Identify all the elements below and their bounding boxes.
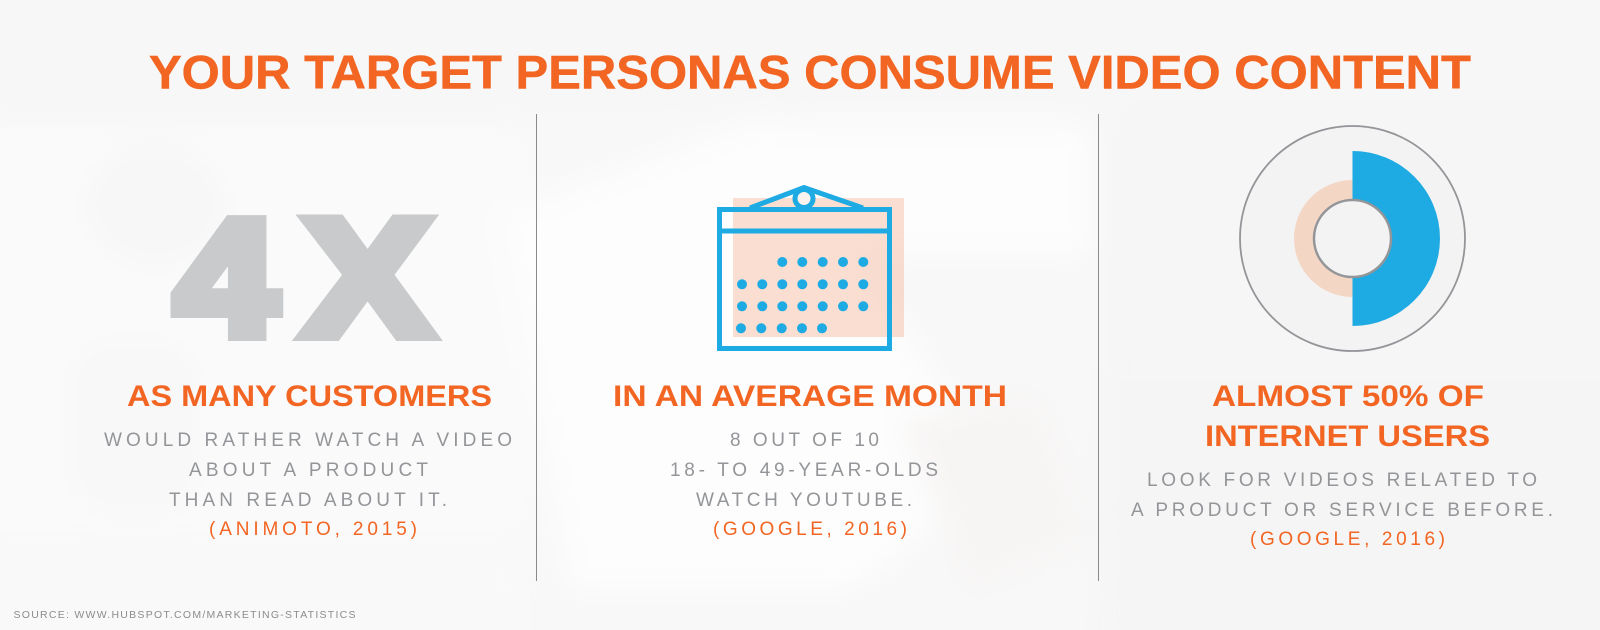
panel: average month: [613, 188, 1007, 540]
citation: (ANIMOTO, 2015): [209, 519, 417, 540]
body text: 8 OUT OF 10: [730, 430, 879, 451]
source note: SOURCE: WWW.HUBSPOT.COM/MARKETING-STATISTICS: [14, 609, 356, 621]
body text: [1131, 470, 1553, 521]
body text: WATCH YOUTUBE.: [696, 490, 912, 511]
heading: ALMOST 50% OF: [1212, 380, 1484, 413]
panel: almost 50%: INTERNET USERS: [1205, 420, 1490, 453]
body text: LOOK FOR VIDEOS RELATED TO: [1147, 470, 1537, 491]
title: YOUR TARGET PERSONAS CONSUME VIDEO CONTENT: [149, 46, 1471, 98]
column dividers: [536, 114, 1098, 581]
body text: [104, 430, 512, 511]
body text: THAN READ ABOUT IT.: [169, 490, 447, 511]
icon: calendar: [719, 188, 904, 348]
heading: AS MANY CUSTOMERS: [127, 380, 492, 413]
panel: almost 50%: [1131, 126, 1553, 550]
body text: ABOUT A PRODUCT: [189, 460, 428, 481]
panel: 4X customers: [104, 186, 512, 540]
heading: IN AN AVERAGE MONTH: [613, 380, 1007, 413]
body text: WOULD RATHER WATCH A VIDEO: [104, 430, 512, 451]
body text: A PRODUCT OR SERVICE BEFORE.: [1131, 500, 1553, 521]
big stat 4X: 4: [175, 186, 277, 370]
body text: [670, 430, 938, 511]
body text: 18- TO 49-YEAR-OLDS: [670, 460, 938, 481]
donut chart: [1240, 126, 1465, 351]
big stat 4X: [175, 186, 431, 370]
big stat 4X: X: [304, 186, 431, 370]
citation: (GOOGLE, 2016): [1250, 529, 1445, 550]
citation: (GOOGLE, 2016): [713, 519, 907, 540]
